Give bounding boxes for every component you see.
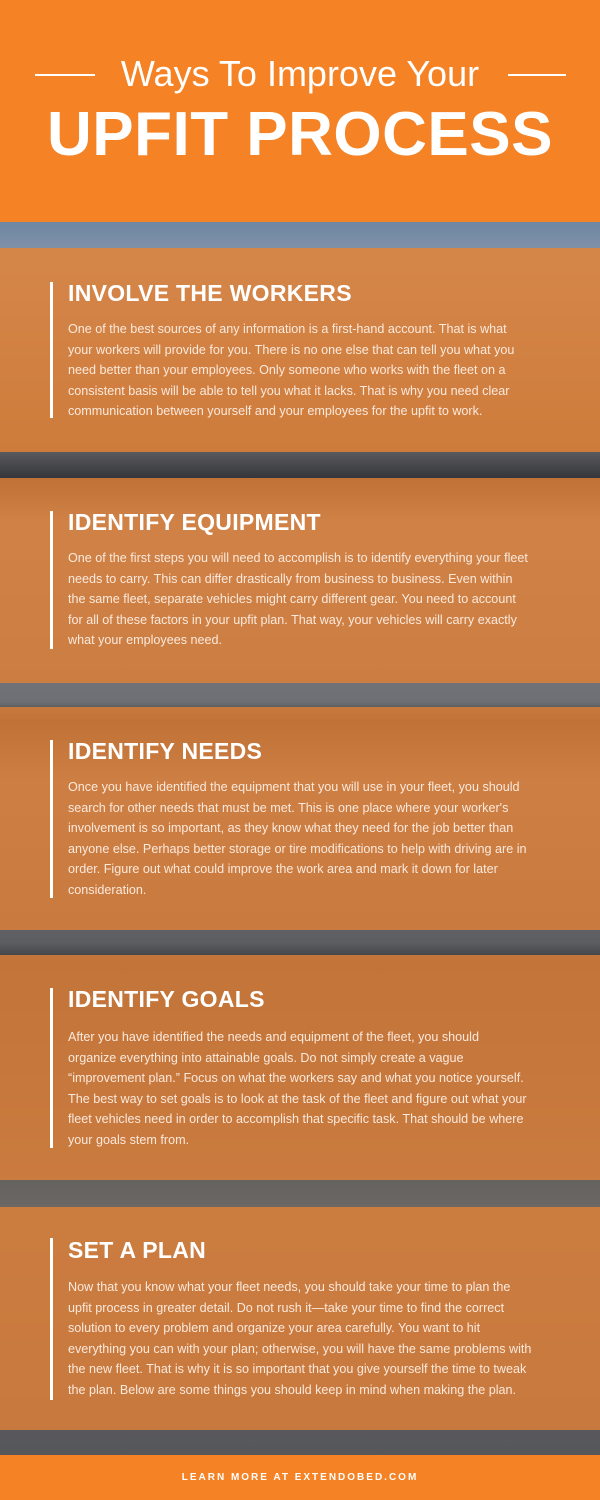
text block: upfit process in greater detail. Do not rush it—take your time to find the correct [68,1300,504,1314]
footer [0,1455,600,1500]
text block [68,780,527,896]
text block: your workers will provide for you. There is no one else that can tell you what you [68,342,514,356]
text block: Now that you know what your fleet needs, you should take your time to plan the [68,1280,510,1294]
text block: organize everything into attainable goals. Do not simply create a vague [68,1050,464,1064]
text block: consistent basis will be able to tell you what it lacks. That is why you need clear [68,384,509,398]
text block: “improvement plan.” Focus on what the workers say and what you notice yourself. [68,1071,524,1085]
heading: INVOLVE THE WORKERS [68,280,352,306]
text block: fleet vehicles need in order to accomplish that specific task. That should be where [68,1112,524,1126]
text block: solution to every problem and organize your area carefully. You want to hit [68,1321,480,1335]
text block: One of the best sources of any information is a first-hand account. That is what [68,322,507,336]
panel: involve the workers [0,248,600,452]
panel: set a plan [0,1207,600,1430]
text block [68,1030,527,1146]
heading: IDENTIFY NEEDS [68,738,262,764]
text block: what your employees need. [68,633,222,647]
heading: SET A PLAN [68,1237,206,1263]
text block: consideration. [68,882,146,896]
subtitle: Ways To Improve Your [121,53,479,94]
text block: the same fleet, separate vehicles might carry different gear. You need to account [68,592,516,606]
heading: IDENTIFY GOALS [68,986,265,1012]
title: UPFIT PROCESS [47,100,553,169]
text block: your goals stem from. [68,1132,189,1146]
text block: needs to carry. This can differ drastically from business to business. Even within [68,572,512,586]
heading: IDENTIFY EQUIPMENT [68,509,321,535]
text block: order. Figure out what could improve the work area and mark it down for later [68,862,498,876]
text block [68,322,514,418]
text block: anyone else. Perhaps better storage or tire modifications to help with driving are in [68,842,527,856]
header [0,0,600,222]
text block: involvement is so important, as they know what they need for the job better than [68,821,513,835]
text block: Once you have identified the equipment that you will use in your fleet, you should [68,780,520,794]
panel: identify needs [0,707,600,930]
text block: everything you can with your plan; otherwise, you will have the same problems with [68,1342,531,1356]
text block: The best way to set goals is to look at the task of the fleet and figure out what your [68,1092,527,1106]
text block: communication between yourself and your employees for the upfit to work. [68,404,482,418]
text block [68,1280,531,1396]
text block: One of the first steps you will need to accomplish is to identify everything your fleet [68,551,528,565]
panel: identify equipment [0,478,600,683]
footer: LEARN MORE AT EXTENDOBED.COM [182,1472,418,1483]
text block [68,551,528,647]
text block: need better than your employees. Only someone who works with the fleet on a [68,363,506,377]
text block: After you have identified the needs and equipment of the fleet, you should [68,1030,479,1044]
text block: the plan. Below are some things you should keep in mind when making the plan. [68,1382,516,1396]
text block: search for other needs that must be met. This is one place where your worker's [68,800,508,814]
panel: identify goals [0,955,600,1180]
text block: the new fleet. That is why it is so important that you give yourself the time to tweak [68,1362,526,1376]
text block: for all of these factors in your upfit plan. That way, your vehicles will carry exactly [68,612,517,626]
